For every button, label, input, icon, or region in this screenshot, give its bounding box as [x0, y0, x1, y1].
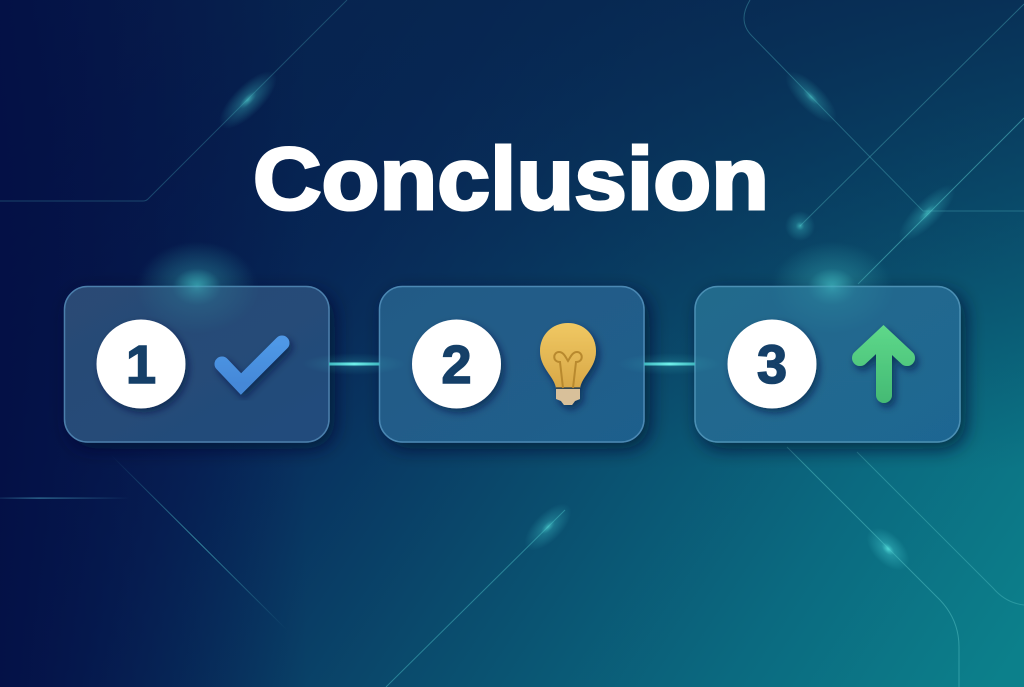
connector 1 to 2	[302, 353, 406, 375]
background light glows	[139, 63, 963, 578]
number badge 2: 2	[441, 335, 472, 395]
card 1: check	[64, 241, 329, 442]
card 3 top glow	[770, 241, 894, 333]
icon: check mark	[222, 343, 282, 384]
card 1 top glow	[135, 241, 259, 333]
number badge 3	[728, 320, 816, 408]
number badge 1: 1	[126, 335, 156, 395]
number badge 2	[412, 320, 501, 408]
number badge 3: 3	[757, 335, 787, 395]
number badge 1	[96, 320, 186, 408]
title: Conclusion	[253, 129, 769, 228]
card 2: idea	[380, 286, 644, 442]
icon: up arrow	[860, 336, 907, 395]
connector 2 to 3	[618, 353, 722, 375]
card 3: growth	[695, 241, 960, 442]
icon: light bulb	[540, 323, 596, 405]
